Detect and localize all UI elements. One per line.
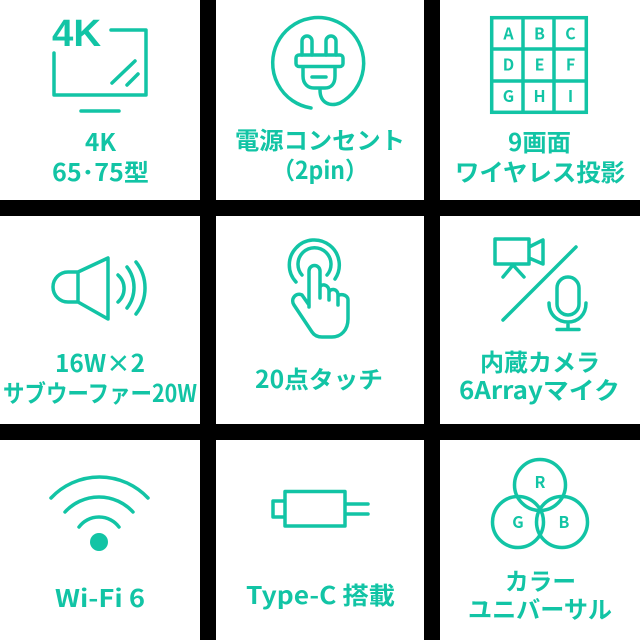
icon: Wi-Fi signal (51, 477, 148, 551)
icon: touching hand (289, 240, 348, 337)
icon: 3x3 letter grid: E (535, 52, 544, 76)
label: 20点タッチ: 20点タッチ (255, 360, 383, 395)
icon: 4K monitor (52, 13, 146, 111)
panel: camera and microphone (440, 216, 640, 424)
label: カラー ユニバーサル: カラー (505, 562, 576, 597)
icon: 3x3 letter grid: F (566, 52, 575, 76)
label: 4K 65・75型: 4K (85, 123, 117, 158)
label: 16W×2 サブウーファー20W: サブウーファー20W (3, 374, 197, 409)
label: 内蔵カメラ 6Arrayマイク (459, 343, 620, 406)
icon: USB Type-C connector (273, 492, 368, 526)
label: 9画面 ワイヤレス投影: ワイヤレス投影 (455, 153, 625, 188)
panel: Wi-Fi 6 (0, 440, 200, 640)
icon: 3x3 letter grid (491, 17, 587, 113)
label: 9画面 ワイヤレス投影: 9画面 (508, 123, 571, 158)
panel: 9 screen wireless casting (440, 0, 640, 200)
label: 内蔵カメラ 6Arrayマイク: 6Arrayマイク (459, 371, 620, 406)
icon: RGB circles: G (512, 509, 524, 533)
panel: color universal (440, 440, 640, 640)
icon: camera, slash and microphone (495, 239, 586, 330)
label: 電源コンセント (2pin): （2pin） (272, 151, 368, 186)
panel: Type-C (216, 440, 424, 640)
icon: RGB circles (492, 460, 588, 548)
icon: 3x3 letter grid: G (503, 83, 514, 107)
panel: 4K display (0, 0, 200, 200)
label: Type-C 搭載: Type-C 搭載 (246, 576, 395, 611)
icon: plug in circle (273, 18, 364, 108)
icon: 4K monitor: 4K (52, 13, 102, 55)
panel: 20 point touch (216, 216, 424, 424)
panel: power outlet (216, 0, 424, 200)
icon: 3x3 letter grid: H (533, 83, 546, 107)
icon: 3x3 letter grid: A (502, 20, 514, 44)
label: 4K 65・75型: 65･75型 (52, 153, 149, 188)
label: Wi-Fi 6: Wi-Fi 6 (55, 579, 145, 614)
panel: speakers (0, 216, 200, 424)
icon: RGB circles: B (559, 509, 570, 533)
icon: 3x3 letter grid: I (568, 83, 573, 107)
label: 16W×2 サブウーファー20W (3, 344, 197, 409)
label: 9画面 ワイヤレス投影 (455, 123, 625, 188)
label: カラー ユニバーサル: ユニバーサル (468, 590, 612, 625)
icon: 3x3 letter grid: B (534, 20, 545, 44)
label: カラー ユニバーサル (468, 562, 612, 625)
label: 電源コンセント (2pin): 電源コンセント (235, 121, 405, 156)
icon: RGB circles: R (535, 469, 546, 493)
icon: speaker with sound waves (53, 258, 145, 319)
label: 4K 65・75型 (52, 123, 149, 188)
icon: 3x3 letter grid: C (565, 20, 576, 44)
label: 内蔵カメラ 6Arrayマイク: 内蔵カメラ (480, 343, 600, 378)
icon: 3x3 letter grid: D (503, 52, 514, 76)
label: 16W×2 サブウーファー20W: 16W×2 (55, 344, 145, 379)
label: 電源コンセント (2pin) (235, 121, 405, 186)
